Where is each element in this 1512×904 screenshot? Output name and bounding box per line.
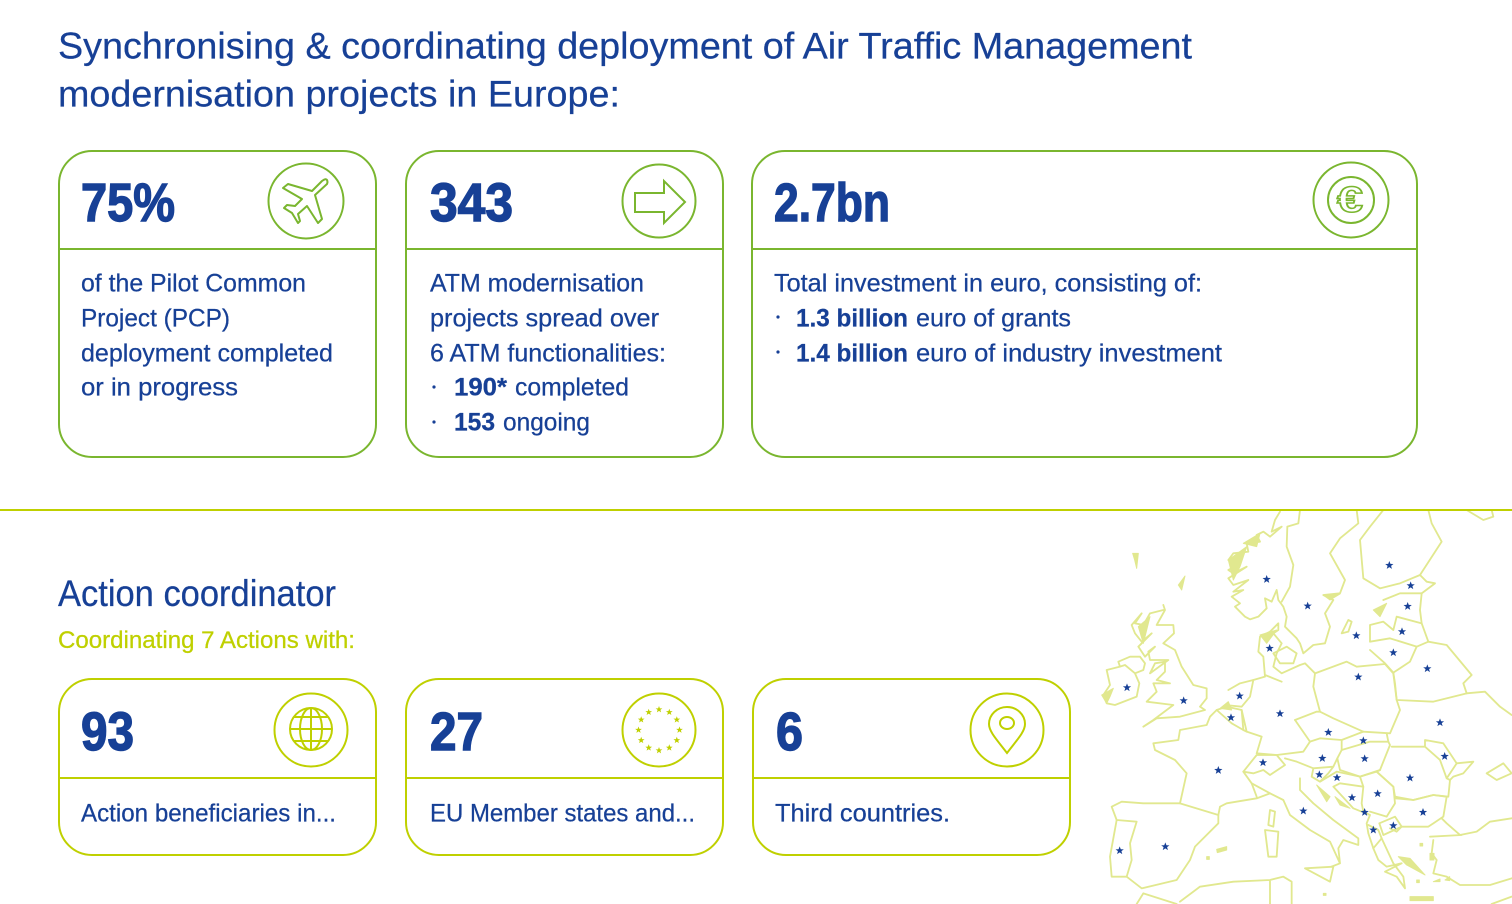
description: investment: euro of grants: [916, 304, 1071, 332]
stat: 93: 93: [81, 702, 134, 762]
description: PCP: of the Pilot Common: [81, 270, 306, 298]
icon: airplane: [268, 164, 344, 238]
panel: 2.7bn investment: [752, 151, 1417, 457]
title: Synchronising & coordinating deployment of Air Traffic Management: [58, 26, 1193, 66]
description: PCP: or in progress: [81, 374, 238, 402]
description: PCP: [81, 270, 333, 402]
Germany and Denmark: [1253, 623, 1320, 720]
description: projects: 190*: [454, 374, 507, 402]
title: [58, 26, 1193, 114]
description: investment: 1.3 billion: [796, 304, 908, 332]
France: [1153, 710, 1270, 815]
description: PCP: deployment completed: [81, 340, 333, 368]
Western Balkans: [1312, 767, 1402, 848]
label: member states: EU Member states and...: [430, 800, 695, 828]
stat: 343: 343: [430, 173, 513, 233]
icon: euro coin: €: [1337, 179, 1363, 220]
description: investment: [774, 270, 1222, 368]
icon: EU stars: [622, 694, 696, 766]
description: projects: ATM modernisation: [430, 270, 644, 298]
description: projects: ongoing: [503, 408, 590, 436]
Czechia Slovakia: [1295, 720, 1388, 750]
Romania Moldova: [1377, 740, 1457, 800]
panel: 343 projects: [406, 151, 723, 457]
stat: 75%: 75%: [81, 173, 175, 233]
label: third countries: Third countries.: [775, 800, 950, 828]
description: projects: 153: [454, 408, 495, 436]
stars: [1116, 561, 1449, 854]
panel: 6 third countries: [753, 679, 1070, 855]
heading: action coordinator: Action coordinator: [58, 573, 336, 614]
icon: arrow: [622, 164, 696, 238]
Baltics: [1370, 593, 1422, 673]
Switzerland Austria: [1243, 742, 1337, 775]
Norway coast and border: [1228, 510, 1358, 653]
stat: 27: 27: [430, 702, 483, 762]
description: investment: Total investment in euro, consisting of:: [774, 270, 1202, 298]
title: modernisation projects in Europe:: [58, 74, 620, 114]
Benelux: [1217, 680, 1253, 730]
description: projects: 6 ATM functionalities:: [430, 340, 666, 368]
Iberia: [1112, 802, 1218, 888]
Britain and Ireland: [1132, 605, 1207, 727]
panel: 75% PCP deployment: [59, 151, 376, 457]
label: beneficiaries: Action beneficiaries in...: [81, 800, 336, 828]
description: projects: completed: [515, 374, 629, 402]
Bulgaria Greece Turkey: [1390, 795, 1447, 832]
description: projects: projects spread over: [430, 304, 659, 332]
description: PCP: Project (PCP): [81, 304, 230, 332]
panel: 93 beneficiaries: [59, 679, 376, 855]
islands: [1102, 533, 1450, 901]
icon: euro coin: [1314, 162, 1388, 238]
map of Europe with member stars: [1102, 510, 1512, 904]
icon: globe: [274, 694, 348, 766]
description: investment: 1.4 billion: [796, 340, 908, 368]
Hungary: [1337, 742, 1390, 777]
stat: 6: 6: [776, 702, 803, 762]
Italy: [1252, 778, 1358, 867]
icon: location pin: [970, 694, 1044, 766]
subheading: coordinating 7 actions: Coordinating 7 Actions with:: [58, 627, 355, 654]
description: investment: euro of industry investment: [916, 340, 1222, 368]
North Africa: [1137, 877, 1292, 904]
panel: 27 EU member states: [406, 679, 723, 855]
Poland: [1313, 662, 1400, 733]
Belarus and Ukraine: [1393, 642, 1472, 702]
description: projects: [430, 270, 666, 436]
stat: 2.7bn: 2.7bn: [774, 173, 890, 233]
